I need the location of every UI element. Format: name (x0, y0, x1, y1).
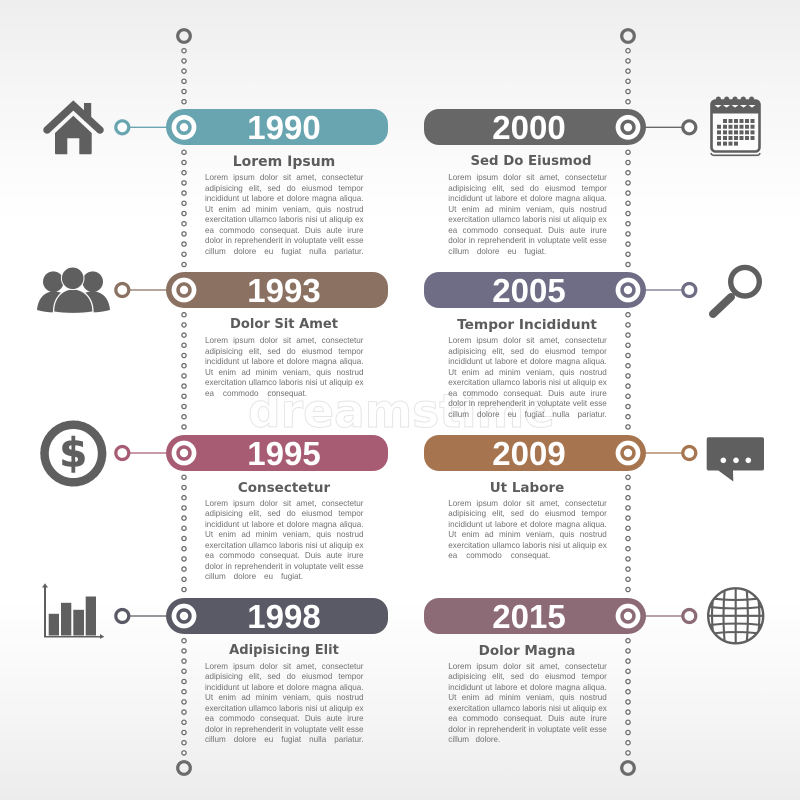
text block: Ut enim ad minim veniam, quis nostrud (448, 693, 607, 702)
icon: calendar (711, 96, 760, 155)
year bar 2009 (424, 434, 646, 470)
text block: cillum dolore. (448, 735, 500, 744)
icons and connector (40, 420, 196, 486)
icon: speech bubble (707, 437, 764, 481)
text block: adipisicing elit, sed do eiusmod tempor (448, 509, 607, 518)
heading: Adipisicing Elit (229, 642, 339, 658)
text block: cillum dolore eu fugiat nulla pariatur. (205, 247, 364, 256)
connector (645, 121, 696, 134)
heading: Dolor Sit Amet (230, 317, 338, 332)
text block: adipisicing elit, sed do eiusmod tempor (448, 347, 607, 356)
icons and connector (616, 264, 762, 318)
icons and connector (616, 587, 764, 644)
text block: Lorem ipsum dolor sit amet, consectetur (448, 336, 607, 345)
panel: 1990 Lorem Ipsum (43, 100, 388, 256)
year bar 1993: 1993 (247, 272, 321, 309)
icons and connector (42, 583, 196, 639)
panel: 2009 Ut Labore (424, 434, 764, 560)
text block: incididunt ut labore et dolore magna aliqua. (448, 194, 607, 203)
year bar 2009: 2009 (492, 434, 566, 472)
icon: magnifier (713, 267, 759, 314)
connector (116, 121, 167, 134)
icon: people (37, 267, 110, 314)
target (172, 603, 196, 628)
text block: exercitation ullamco laboris nisi ut aliquip ex (448, 541, 607, 550)
text block: exercitation ullamco laboris nisi ut aliquip ex (205, 378, 364, 387)
text block (205, 173, 364, 256)
year bar 2015: 2015 (492, 598, 566, 634)
connector (116, 609, 167, 622)
text block: cillum dolore eu fugiat nulla pariatur. (205, 735, 364, 744)
text block: incididunt ut labore et dolore magna aliqua. (448, 683, 607, 692)
text block: ea commodo consequat. Duis aute irure (205, 226, 364, 235)
year bar 2000: 2000 (492, 109, 566, 146)
text block: Lorem ipsum dolor sit amet, consectetur (205, 336, 364, 345)
heading: Consectetur (238, 480, 330, 496)
connector (116, 446, 167, 459)
text block: Ut enim ad minim veniam, quis nostrud (448, 205, 607, 214)
icons and connector (37, 268, 196, 313)
text block: Ut enim ad minim veniam, quis nostrud (205, 368, 364, 377)
icon: bar chart (42, 583, 104, 638)
text block: dolor in reprehenderit in voluptate velit esse (205, 562, 364, 571)
panel: 1993 Dolor Sit Amet (37, 268, 388, 398)
connector (645, 446, 696, 459)
year bar 1998: 1998 (247, 598, 321, 634)
connector (645, 284, 696, 296)
target (616, 603, 640, 628)
text block: exercitation ullamco laboris nisi ut aliquip ex (448, 704, 607, 713)
text block: incididunt ut labore et dolore magna aliqua. (205, 357, 364, 366)
text block: adipisicing elit, sed do eiusmod tempor (205, 509, 364, 518)
text block: Ut enim ad minim veniam, quis nostrud (205, 530, 364, 539)
text block: Lorem ipsum dolor sit amet, consectetur (448, 499, 607, 508)
text block: Ut enim ad minim veniam, quis nostrud (448, 530, 607, 539)
text block: adipisicing elit, sed do eiusmod tempor (205, 184, 364, 193)
text block (448, 336, 607, 419)
panel: 2015 Dolor Magna (424, 587, 764, 744)
target (616, 278, 640, 302)
target (616, 440, 640, 465)
text block: dolor in reprehenderit in voluptate velit esse (448, 725, 607, 734)
text block (205, 499, 364, 581)
text block: incididunt ut labore et dolore magna aliqua. (205, 520, 364, 529)
text block: ea commodo consequat. (205, 389, 307, 398)
year bar 2005 (424, 272, 646, 308)
text block: incididunt ut labore et dolore magna aliqua. (448, 520, 607, 529)
heading: Dolor Magna (479, 642, 575, 658)
text block (448, 662, 607, 744)
text block: Lorem ipsum dolor sit amet, consectetur (448, 662, 607, 671)
target (172, 278, 196, 302)
text block: ea commodo consequat. Duis aute irure (448, 389, 607, 398)
text block: incididunt ut labore et dolore magna aliqua. (205, 194, 364, 203)
year bar 2005: 2005 (492, 272, 566, 309)
text block: exercitation ullamco laboris nisi ut aliquip ex (448, 378, 607, 387)
text block: Ut enim ad minim veniam, quis nostrud (205, 693, 364, 702)
heading: Tempor Incididunt (457, 317, 597, 333)
target (172, 440, 196, 465)
year bar 1990 (166, 109, 388, 145)
text block: ea commodo consequat. Duis aute irure (448, 714, 607, 723)
watermark: dreamstime (248, 384, 555, 438)
text block (448, 499, 607, 560)
icons and connector (616, 437, 764, 482)
panel: 1998 Adipisicing Elit (42, 583, 388, 744)
text block: exercitation ullamco laboris nisi ut aliquip ex (205, 704, 364, 713)
text block: exercitation ullamco laboris nisi ut aliquip ex (448, 215, 607, 224)
icons and connector (43, 100, 196, 154)
year bar 1995: 1995 (247, 434, 321, 472)
text block: dolor in reprehenderit in voluptate velit esse (448, 399, 607, 408)
icons and connector (616, 96, 761, 156)
text block: Lorem ipsum dolor sit amet, consectetur (448, 173, 607, 182)
text block: cillum dolore eu fugiat. (205, 572, 303, 581)
year bar 1998 (166, 598, 388, 634)
target (172, 115, 196, 140)
heading: Lorem Ipsum (233, 154, 335, 170)
icon: dollar coin (41, 421, 105, 485)
icon: globe (706, 586, 766, 645)
text block: adipisicing elit, sed do eiusmod tempor (448, 672, 607, 681)
panel: 2000 Sed Do Eiusmod (424, 96, 761, 256)
text block: ea commodo consequat. Duis aute irure (205, 714, 364, 723)
text block: incididunt ut labore et dolore magna aliqua. (448, 357, 607, 366)
panel: 2005 Tempor Incididunt (424, 264, 762, 419)
text block: exercitation ullamco laboris nisi ut aliquip ex (205, 541, 364, 550)
connector (645, 609, 696, 622)
text block (448, 173, 607, 256)
text block: exercitation ullamco laboris nisi ut aliquip ex (205, 215, 364, 224)
text block: ea commodo consequat. Duis aute irure (448, 226, 607, 235)
target (616, 115, 640, 140)
text block: Lorem ipsum dolor sit amet, consectetur (205, 173, 364, 182)
text block: dolor in reprehenderit in voluptate velit esse (448, 236, 607, 245)
text block: Lorem ipsum dolor sit amet, consectetur (205, 499, 364, 508)
year bar 1990: 1990 (247, 109, 321, 146)
heading: Ut Labore (490, 480, 564, 496)
text block (205, 662, 364, 744)
text block: adipisicing elit, sed do eiusmod tempor (448, 184, 607, 193)
year bar 1995 (166, 434, 388, 470)
text block: Ut enim ad minim veniam, quis nostrud (448, 368, 607, 377)
connector (116, 284, 167, 296)
text block: Ut enim ad minim veniam, quis nostrud (205, 205, 364, 214)
panel: 1995 Consectetur (40, 420, 388, 581)
text block: incididunt ut labore et dolore magna aliqua. (205, 683, 364, 692)
text block: ea commodo consequat. (448, 551, 550, 560)
text block: cillum dolore eu fugiat. (448, 247, 546, 256)
text block: dolor in reprehenderit in voluptate velit esse (205, 236, 364, 245)
year bar 2015 (424, 598, 646, 634)
text block: adipisicing elit, sed do eiusmod tempor (205, 347, 364, 356)
heading: Sed Do Eiusmod (470, 154, 592, 169)
text block (205, 336, 364, 398)
icon: dollar coin: $ (59, 430, 87, 476)
text block: cillum dolore eu fugiat nulla pariatur. (448, 410, 607, 419)
year bar 2000 (424, 109, 646, 145)
text block: ea commodo consequat. Duis aute irure (205, 551, 364, 560)
text block: Lorem ipsum dolor sit amet, consectetur (205, 662, 364, 671)
icon: house (47, 103, 100, 154)
text block: dolor in reprehenderit in voluptate velit esse (205, 725, 364, 734)
year bar 1993 (166, 272, 388, 308)
text block: adipisicing elit, sed do eiusmod tempor (205, 672, 364, 681)
